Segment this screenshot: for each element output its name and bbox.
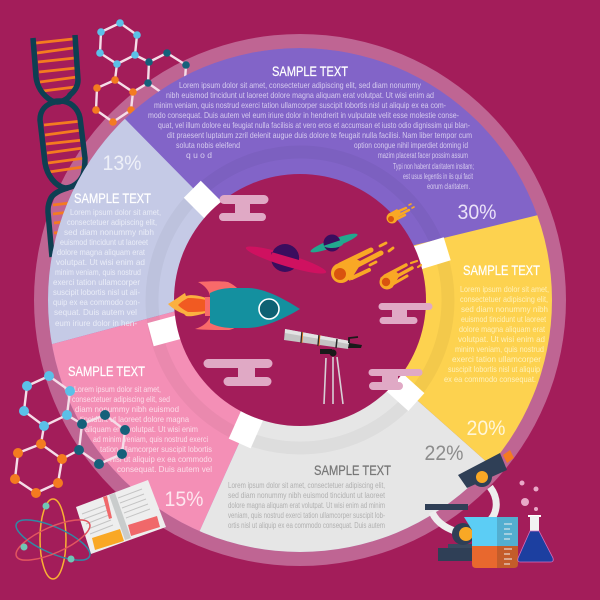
heading: lavender: SAMPLE TEXT	[74, 190, 151, 206]
text block: lavender: quip ex ea commodo con-	[53, 297, 140, 307]
text block: yellow: dolore magna aliquam erat	[459, 324, 546, 334]
inner translucent band	[152, 152, 448, 448]
text block: lavender: consectetuer adipiscing elit,	[67, 217, 157, 227]
percent: 13%: 13%	[102, 152, 142, 175]
text block: gray: ortis nisl ut aliquip ex ea commodo consequat. Duis autem	[228, 520, 385, 530]
segment: pink 15%	[52, 312, 241, 531]
text block: lavender: eum iriure dolor in hen-	[55, 318, 137, 328]
inner circle	[174, 174, 426, 426]
icon: bubbles	[520, 480, 538, 511]
text block: pink: tincidunt ut laoreet dolore magna	[80, 414, 189, 424]
text block: purple: modo consequat. Duis autem vel eum iriure dolor in hendrerit in vulputate velit esse molestie conse-	[148, 110, 459, 120]
segment: purple 30%	[48, 48, 552, 552]
segment: yellow 20%	[406, 215, 552, 461]
chart: pie of five segments	[48, 48, 552, 552]
outer ring	[34, 34, 566, 566]
icon: ringed planet teal	[309, 231, 359, 255]
text block: lavender: minim veniam, quis nostrud	[55, 267, 141, 277]
text block: purple: mazim placerat facer possim assum	[378, 151, 468, 160]
text block: yellow: exerci tation ullamcorper	[452, 354, 541, 364]
percent: 15%: 15%	[164, 488, 204, 511]
icon: molecule top	[92, 19, 190, 126]
text block: lavender: exerci tation ullamcorper	[53, 277, 140, 287]
text block: purple: est usus legentis in iis qui facit	[403, 172, 474, 181]
text block: pink: nisl ut aliquip ex ea commodo	[110, 454, 212, 464]
text block: yellow: euismod tincidunt ut laoreet	[461, 314, 547, 324]
text block: yellow: minim veniam, quis nostrud	[455, 344, 544, 354]
heading: yellow: SAMPLE TEXT	[463, 262, 540, 278]
text block: pink: ad minim veniam, quis nostrud exerci	[93, 434, 208, 444]
percent: 20%: 20%	[466, 417, 506, 440]
text block: lavender: suscipit lobortis nisl ut ali-	[53, 287, 140, 297]
icon: large comet	[331, 243, 393, 283]
heading: pink: SAMPLE TEXT	[68, 363, 145, 379]
segment: gray 22%	[200, 392, 486, 552]
text block: pink: consequat. Duis autem vel	[117, 464, 212, 474]
text block: purple: nibh euismod tincidunt ut laoreet dolore magna aliquam erat volutpat. Ut wisi enim ad	[166, 90, 434, 100]
text block: purple: quat, vel illum dolore eu feugiat nulla facilisis at vero eros et accumsan et iusto odio dignissim qui blan-	[158, 120, 470, 130]
window	[259, 299, 279, 319]
text block: lavender	[53, 190, 161, 328]
text block: yellow: ex ea commodo consequat.	[444, 374, 536, 384]
percent: 22%: 22%	[424, 442, 464, 465]
text block: gray: sed diam nonummy nibh euismod tincidunt ut laoreet	[228, 490, 385, 500]
white tabs	[148, 181, 451, 448]
icon: molecule lower left	[10, 371, 130, 498]
icon: rocket	[168, 281, 300, 330]
text block: purple: Lorem ipsum dolor sit amet, consectetuer adipiscing elit, sed diam nonummy	[179, 80, 422, 90]
flame	[168, 293, 206, 316]
icon: flask	[518, 515, 553, 562]
text block: pink	[68, 363, 212, 474]
text block: lavender: dolore magna aliquam erat	[57, 247, 146, 257]
clouds	[204, 195, 433, 390]
heading: gray: SAMPLE TEXT	[314, 462, 391, 478]
text block: lavender: euismod tincidunt ut laoreet	[60, 237, 149, 247]
text block: yellow: sed diam nonummy nibh	[461, 304, 548, 314]
heading: purple: SAMPLE TEXT	[272, 63, 348, 79]
text block: purple: dit praesent luptatum zzril delenit augue duis dolore te feugait nulla facilisi. Nam liber tempor cum	[167, 130, 472, 140]
text block: yellow: suscipit lobortis nisl ut aliquip	[448, 364, 540, 374]
text block: gray: Lorem ipsum dolor sit amet, consectetuer adipiscing elit,	[228, 480, 385, 490]
text block: yellow: consectetuer adipiscing elit,	[460, 294, 548, 304]
text block: pink: tation ullamcorper suscipit lobortis	[100, 444, 212, 454]
text block: lavender: volutpat. Ut wisi enim ad	[56, 257, 145, 267]
fins	[198, 281, 237, 296]
text block: pink: Lorem ipsum dolor sit amet,	[74, 384, 161, 394]
percent: 30%: 30%	[458, 201, 496, 224]
text block: purple: soluta nobis eleifend	[176, 140, 240, 150]
text block: yellow: volutpat. Ut wisi enim ad	[458, 334, 545, 344]
text block: pink: aliquam erat volutpat. Ut wisi enim	[85, 424, 198, 434]
text block: lavender: sequat. Duis autem vel	[54, 307, 137, 317]
nozzle	[205, 297, 212, 316]
icon: ringed planet crimson	[244, 242, 328, 278]
text block: purple: minim veniam, quis nostrud exerci tation ullamcorper suscipit lobortis nisl ut aliquip ex ea com-	[154, 100, 446, 110]
text block: purple: eorum claritatem.	[427, 182, 470, 191]
text block: yellow: Lorem ipsum dolor sit amet,	[460, 284, 549, 294]
icon: microscope	[425, 450, 514, 561]
icon: open book	[76, 480, 166, 554]
text block: purple: q u o d	[186, 150, 212, 160]
text block: lavender: sed diam nonummy nibh	[64, 227, 154, 237]
text block: purple	[148, 63, 474, 191]
text block: gray: veniam, quis nostrud exerci tation ullamcorper suscipit lob-	[228, 510, 385, 520]
text block: yellow	[444, 262, 549, 384]
icon: telescope	[284, 329, 362, 404]
text block: purple: Typi non habent claritatem insitam;	[393, 162, 474, 171]
icon: DNA helix	[33, 35, 85, 257]
icon: atom	[11, 499, 95, 579]
text block: pink: diam nonummy nibh euismod	[75, 404, 179, 414]
text block: lavender: Lorem ipsum dolor sit amet,	[70, 207, 161, 217]
icon: small comet	[386, 204, 414, 224]
text block: pink: consectetuer adipiscing elit, sed	[72, 394, 170, 404]
text block: gray: dolore magna aliquam erat volutpat. Ut wisi enim ad minim	[228, 500, 385, 510]
text block: purple: option congue nihil imperdiet doming id	[354, 140, 468, 150]
segment: lavender 13%	[48, 118, 204, 344]
body	[210, 288, 300, 328]
icon: medium comet	[380, 261, 421, 290]
icon: beaker	[464, 517, 518, 568]
text block: gray	[228, 462, 391, 530]
